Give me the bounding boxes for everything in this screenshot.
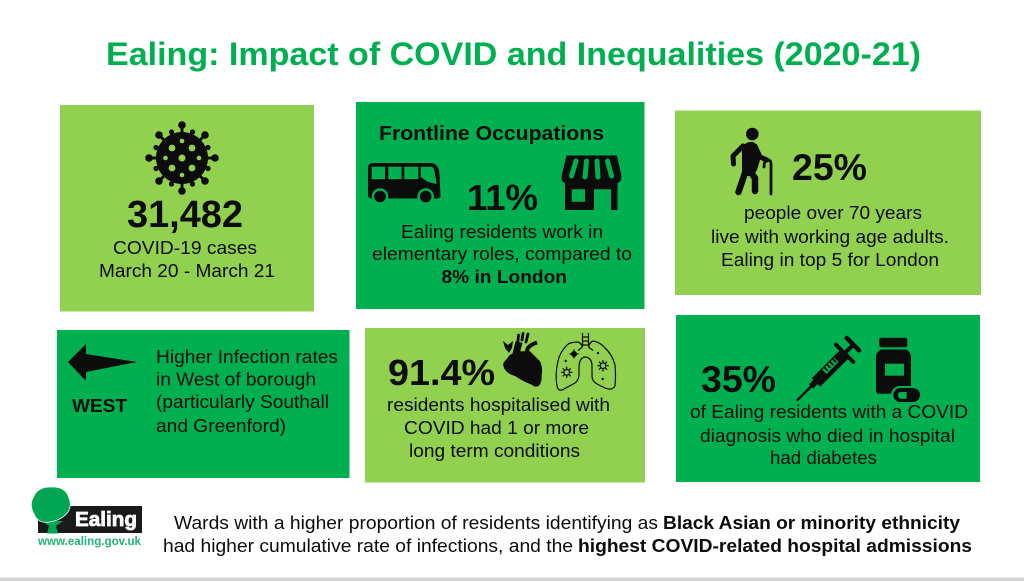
description — [711, 202, 949, 270]
title: Ealing: Impact of COVID and Inequalities (2020-21) — [106, 36, 921, 72]
description: Ealing in top 5 for London — [721, 249, 939, 270]
description — [156, 346, 338, 436]
icon: syringe — [798, 338, 859, 400]
description: residents hospitalised with — [387, 394, 610, 415]
icon: elderly person with cane — [733, 128, 771, 194]
description: in West of borough — [156, 368, 316, 390]
logo wordmark: Ealing — [75, 509, 137, 531]
statistic: 91.4% — [388, 352, 495, 393]
logo web address: www.ealing.gov.uk — [37, 536, 142, 548]
icon: lungs — [556, 333, 616, 390]
case count: 31,482 — [127, 194, 243, 236]
statistic: 25% — [792, 147, 867, 188]
description: people over 70 years — [744, 202, 922, 223]
icon: heart — [503, 334, 542, 387]
description — [690, 401, 968, 468]
description: elementary roles, compared to — [372, 243, 632, 264]
panel: over 70s — [675, 110, 981, 295]
description: had diabetes — [770, 447, 877, 468]
arrow: west — [68, 344, 137, 381]
icon: tree — [31, 487, 70, 534]
case description: COVID-19 cases — [113, 237, 257, 258]
panel: diabetes — [676, 315, 980, 482]
description — [387, 394, 610, 461]
panel: long term conditions — [365, 328, 645, 482]
description: Higher Infection rates — [156, 346, 338, 367]
description: (particularly Southall — [156, 391, 329, 412]
description: diagnosis who died in hospital — [700, 425, 955, 446]
footer statement: Black Asian or minority ethnicity — [663, 512, 961, 533]
description: Ealing residents work in — [401, 221, 603, 242]
panel: west of borough — [57, 330, 350, 478]
description: live with working age adults. — [711, 226, 949, 247]
description: and Greenford) — [156, 415, 286, 436]
footer statement: Wards with a higher proportion of residents identifying as — [174, 512, 658, 533]
description: long term conditions — [409, 440, 580, 461]
icon: bus — [368, 163, 440, 205]
icon: medicine bottle and pill — [876, 338, 922, 404]
footer statement: had higher cumulative rate of infections, and the — [163, 535, 573, 556]
west label: WEST — [72, 396, 127, 416]
case description: March 20 - March 21 — [99, 260, 275, 281]
panel: COVID-19 cases — [60, 105, 314, 312]
icon: virus — [145, 121, 219, 195]
panel: frontline occupations — [356, 102, 644, 309]
statistic: 35% — [701, 359, 776, 400]
icon: shop — [561, 156, 622, 210]
case description — [99, 237, 275, 281]
statistic: 11% — [467, 177, 538, 218]
heading: Frontline Occupations — [379, 123, 604, 145]
footer statement — [163, 512, 972, 556]
description — [372, 221, 632, 287]
footer statement: highest COVID-related hospital admissions — [578, 535, 972, 556]
description: of Ealing residents with a COVID — [690, 401, 968, 422]
description: 8% in London — [442, 266, 567, 287]
description: COVID had 1 or more — [404, 417, 589, 438]
logo: Ealing council — [31, 487, 142, 548]
